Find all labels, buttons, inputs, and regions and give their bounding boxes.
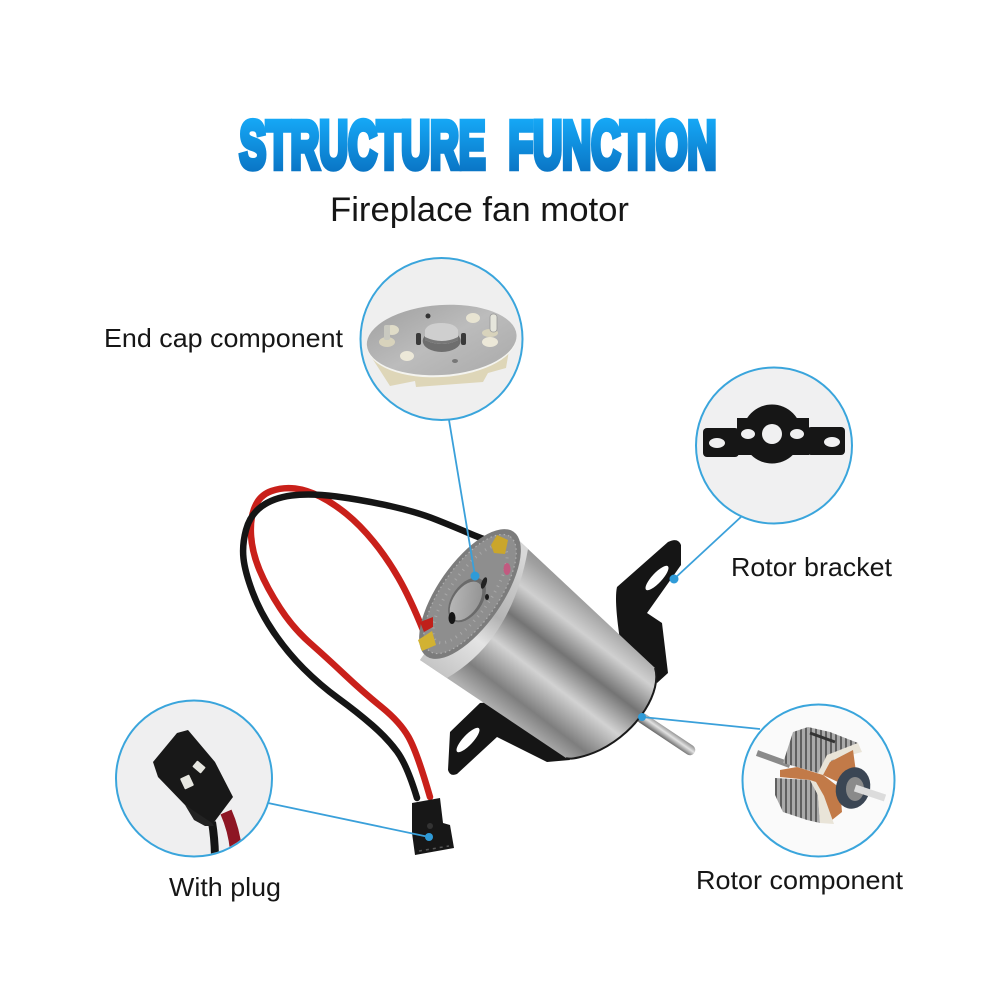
panel: with plug [116,700,272,860]
callout: rotor line [638,713,760,729]
label: rotor bracket: Rotor bracket [731,552,893,582]
title: FUNCTION [508,108,716,183]
top bracket tab [616,540,681,683]
callout: bracket line [670,516,742,584]
end cap face [400,513,540,675]
connector [412,798,454,855]
motor bracket [448,540,681,775]
terminals [491,535,508,554]
panel: rotor bracket [696,368,852,524]
label: rotor component: Rotor component [696,865,904,895]
wires [243,488,495,798]
label: with plug: With plug [169,872,281,902]
subtitle: Fireplace fan motor [330,191,629,229]
motor body [400,513,656,759]
panel: rotor component [742,704,894,856]
label: end cap component: End cap component [104,323,344,353]
callout: end cap line [449,420,480,580]
callout: plug line [268,803,433,841]
lower bracket tab [448,700,570,775]
motor shaft [642,718,690,750]
panel: end cap component [360,258,522,420]
title: STRUCTURE [240,108,486,183]
